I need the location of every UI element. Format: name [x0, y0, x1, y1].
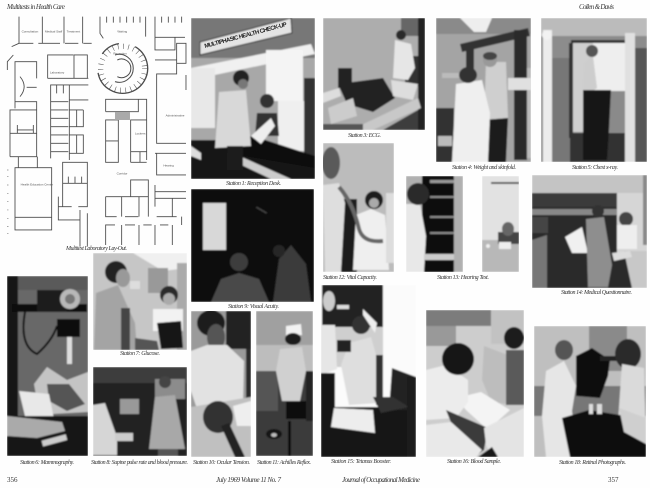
station 1 caption: Station 1: Reception Desk. [226, 181, 281, 187]
right page running head: Collen & Davis [579, 3, 614, 11]
floor plan caption: Multitest Laboratory Lay-Out. [65, 246, 127, 252]
photo: station 1 reception desk [191, 18, 315, 179]
journal name footer: Journal of Occupational Medicine [342, 476, 420, 484]
photo: station 3 ecg [323, 18, 425, 130]
station 16 caption: Station 16: Blood Sample. [447, 459, 501, 465]
station 7 caption: Station 7: Glucose. [120, 351, 160, 357]
floor plan: multitest laboratory layout: Administrative [166, 114, 185, 118]
photo: station 12 vital capacity [323, 143, 394, 272]
photo: station 14 medical questionnaire [532, 175, 647, 288]
photo: station 5 chest x-ray [541, 18, 647, 162]
station 4 caption: Station 4: Weight and skinfold. [452, 164, 516, 171]
station 6 caption: Station 6: Mammography. [20, 460, 74, 466]
photo: station 13 hearing booth [482, 176, 519, 272]
sign text: MULTIPHASIC HEALTH CHECK-UP [204, 22, 288, 50]
station 5 caption: Station 5: Chest x-ray. [572, 165, 618, 171]
station 9 caption: Station 9: Visual Acuity. [228, 304, 279, 310]
station 3 caption: Station 3: ECG. [348, 133, 381, 139]
floor plan: multitest laboratory layout: Corridor [117, 172, 127, 176]
station 11 caption: Station 11: Achilles Reflex. [257, 459, 311, 466]
right page number: 357 [608, 476, 619, 484]
left page number: 356 [7, 476, 18, 484]
floor plan: multitest laboratory layout: Laboratory [50, 70, 65, 74]
station 8 caption: Station 8: Supine pulse rate and blood pressure. [91, 460, 188, 466]
floor plan: multitest laboratory layout: Health Education Center [21, 183, 53, 187]
photo: station 11 achilles reflex [256, 311, 313, 456]
station 14 caption: Station 14: Medical Questionnaire. [561, 289, 632, 296]
photo: station 4 weight and skinfold [436, 18, 531, 162]
photo: station 9 visual acuity [191, 189, 314, 302]
floor plan: multitest laboratory layout: Consultation [22, 30, 39, 34]
station 10 caption: Station 10: Ocular Tension. [193, 460, 250, 466]
floor plan: multitest laboratory layout: Lockers [135, 131, 146, 135]
left page running head: Multitests in Health Care [6, 3, 65, 11]
photo: station 8 supine pulse rate [93, 367, 187, 456]
photo: station 13 hearing test operator [406, 176, 463, 272]
station 12 caption: Station 12: Vital Capacity. [323, 275, 377, 281]
station 15 caption: Station 15: Tetanus Booster. [331, 459, 391, 465]
photo: station 7 glucose [93, 253, 187, 350]
photo: station 10 ocular tension [191, 311, 251, 457]
photo: station 15 tetanus booster [321, 285, 416, 457]
station 13 caption: Station 13: Hearing Test. [437, 275, 489, 281]
floor plan: multitest laboratory layout: Treatment [67, 30, 80, 34]
photo: station 6 mammography [7, 276, 88, 456]
photo: station 18 retinal photographs [534, 326, 646, 457]
floor plan: multitest laboratory layout: Medical Staff [45, 30, 62, 34]
floor plan: multitest laboratory layout: Waiting [117, 30, 128, 34]
photo: station 16 blood sample [426, 310, 524, 457]
floor plan: multitest laboratory layout [7, 17, 186, 247]
floor plan: multitest laboratory layout: Reception [113, 51, 127, 55]
station 18 caption: Station 18: Retinal Photographs. [559, 460, 626, 466]
issue date footer: July 1969 Volume 11 No. 7 [216, 476, 282, 484]
floor plan: multitest laboratory layout: Hearing [163, 164, 174, 168]
